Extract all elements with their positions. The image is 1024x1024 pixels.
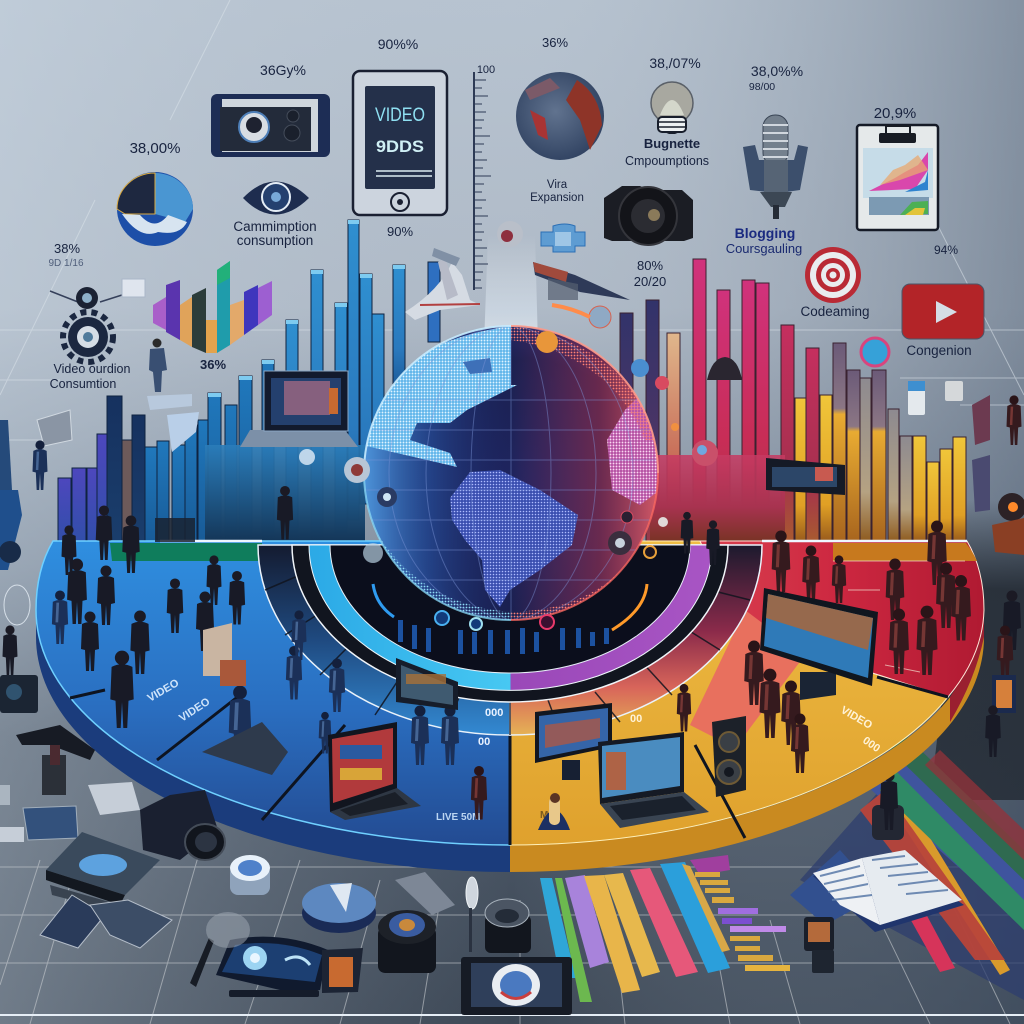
label: codeaming: Codeaming <box>800 304 870 319</box>
small items left of globe <box>147 394 199 542</box>
left side scattered devices <box>0 410 72 713</box>
laptop on blue half <box>328 722 421 820</box>
isometric bar chart <box>153 261 272 353</box>
person statuette base <box>202 722 288 775</box>
back monitor on blue half <box>396 658 458 710</box>
percentage: 20,9%: 20,9% <box>874 105 916 122</box>
percentage: left 38%: 9D 1/16 <box>48 258 84 269</box>
large monitor <box>760 588 878 700</box>
percentage: 38,0%: 98/00 <box>749 81 775 93</box>
icon: gear with lens <box>50 279 145 362</box>
monitor with console, left of globe <box>240 371 358 447</box>
pen <box>190 938 214 987</box>
icon: tablet with video label <box>353 71 447 215</box>
bar top caps, left <box>208 220 405 397</box>
rainbow stripes on floor, right <box>790 735 1024 1000</box>
percentage: 38,00%: 38,00% <box>130 140 180 157</box>
icon: tablet with video label: 9DDS <box>376 137 424 156</box>
figurine on warm half <box>538 793 570 830</box>
spaceship <box>533 262 630 317</box>
inner cell band, left <box>258 545 510 735</box>
colored ring <box>309 545 712 690</box>
label: blogging consuming: Coursgauling <box>726 241 802 256</box>
glow bars at globe base <box>398 620 609 654</box>
dotted hemisphere, upper left <box>362 326 517 467</box>
right bar chart <box>620 259 966 541</box>
label: expansion <box>530 179 584 204</box>
percentage: 80% 20/20: 80% <box>637 258 663 273</box>
monitor on warm half <box>535 703 612 780</box>
dark blot on upper hemisphere <box>463 358 492 374</box>
platform labels: MIX <box>540 810 558 821</box>
papers stack on platform <box>203 623 246 686</box>
small paper pile <box>395 872 455 915</box>
platform top, red half <box>700 541 984 697</box>
wide screen, right of globe <box>766 458 845 495</box>
orange back strip <box>833 543 977 561</box>
stacked mini bars <box>695 872 790 971</box>
dotted land, right rim <box>607 395 660 505</box>
platform labels: LIVE 50M <box>436 812 480 823</box>
label: blogging consuming <box>726 225 802 256</box>
label: bubble consumption: Bugnette <box>644 136 700 151</box>
icon: webcam box <box>211 94 330 157</box>
salmon wedge <box>690 610 805 748</box>
platform labels: VIDEO <box>838 704 875 732</box>
icon: eye <box>243 182 309 214</box>
platform labels <box>146 677 882 823</box>
airplane <box>405 248 480 320</box>
lower rim sparkle, right <box>511 572 620 620</box>
icon: light bulb <box>651 82 693 134</box>
laptop on warm half <box>598 732 709 828</box>
platform top, blue half <box>36 541 510 845</box>
south america landmass <box>450 470 578 607</box>
small containers, right <box>908 381 963 415</box>
percentage: 36% camera: 36Gy% <box>260 62 306 78</box>
ruler scale <box>474 64 495 290</box>
people on blue half <box>52 486 487 820</box>
label: consumption: consumption <box>237 233 313 248</box>
label: bubble consumption: Cmpoumptions <box>625 154 709 168</box>
video camera on tripod <box>16 725 95 795</box>
color strips chart on floor <box>540 855 730 1002</box>
globe left glow <box>364 332 487 616</box>
central black well <box>330 545 690 673</box>
icon: mini globe <box>516 72 604 160</box>
disc stack <box>302 883 376 933</box>
globe <box>359 235 664 628</box>
inner cell band, right <box>510 545 762 735</box>
platform labels: VIDEO <box>177 696 213 725</box>
icon: dslr camera <box>604 186 693 245</box>
percentage: 38,0%: 38,0%% <box>751 63 803 79</box>
platform labels: 000 <box>860 735 882 755</box>
percentage: 90% under tablet: 90% <box>387 224 413 239</box>
photo camera on floor <box>140 790 225 860</box>
photo cards left <box>0 782 140 842</box>
icon: video play button <box>902 284 984 339</box>
photo strip cards left <box>40 895 172 948</box>
ruler scale: 100 <box>477 64 495 76</box>
icon: target <box>805 247 861 303</box>
left bar chart <box>58 220 440 548</box>
white back rim <box>160 540 967 542</box>
blue haze at base of left bars <box>205 445 365 541</box>
red haze at base of right bars <box>650 455 785 541</box>
icon: tablet with video label: VIDEO <box>375 105 425 126</box>
second lens <box>485 899 531 953</box>
icon: clipboard chart <box>857 125 938 230</box>
globe right glow <box>511 326 658 620</box>
percentage: 38,07%: 38,/07% <box>649 55 701 71</box>
orange marker <box>536 331 558 353</box>
platform labels: 00 <box>630 713 642 725</box>
segment dividers <box>70 677 948 845</box>
small device on floor <box>804 917 834 973</box>
label: expansion: Expansion <box>530 192 584 204</box>
video cards <box>216 937 363 997</box>
label: expansion: Vira <box>547 179 568 191</box>
right side scattered devices <box>972 395 1024 757</box>
platform side wall, red end <box>950 610 984 722</box>
platform labels: VIDEO <box>146 677 182 705</box>
figure on tripod, floor right <box>872 770 904 840</box>
magnifier <box>466 877 478 952</box>
open book <box>813 850 964 932</box>
percentage: top 90%: 90%% <box>378 36 418 52</box>
speaker <box>712 716 746 797</box>
people on warm half <box>677 512 971 773</box>
percentage: 80% 20/20: 20/20 <box>634 274 666 289</box>
pink rim, upper right <box>511 326 660 440</box>
light beam <box>484 235 538 345</box>
percentage: 80% 20/20 <box>634 258 666 289</box>
lens <box>378 910 436 973</box>
label: congenion: Congenion <box>906 343 972 358</box>
label: consumption: Cammimption <box>233 219 317 234</box>
green accent strip <box>110 543 262 561</box>
label: consumption <box>233 219 317 248</box>
platform side wall, blue <box>36 610 510 872</box>
platform labels: 00 <box>478 736 490 748</box>
red strip on floor <box>908 912 955 972</box>
stacked reports left <box>46 832 160 912</box>
label: blogging consuming: Blogging <box>735 225 795 241</box>
small blue icon <box>541 224 585 252</box>
label: video consumption: Consumtion <box>50 377 116 391</box>
glass cylinder <box>230 855 270 895</box>
percentage: left 38% <box>48 241 84 269</box>
orange glow accent <box>612 584 647 630</box>
percentage: 38,0% <box>749 63 803 93</box>
small glass bag <box>206 912 250 948</box>
lower rim sparkle, left <box>379 538 511 620</box>
label: video consumption <box>50 362 131 391</box>
floating orbit icons <box>299 221 889 630</box>
segmented circular platform <box>36 541 984 872</box>
icon: eye gauge label: 36% <box>200 357 226 372</box>
platform labels: 000 <box>485 707 503 719</box>
percentage: 36% globe: 36% <box>542 35 568 50</box>
blue glow accent <box>373 584 394 617</box>
label: bubble consumption <box>625 136 709 168</box>
dark ring <box>292 545 728 702</box>
platform top, yellow half <box>510 541 948 845</box>
platform side wall, warm <box>510 610 984 872</box>
icon: pie chart <box>117 172 193 246</box>
percentage: left 38%: 38% <box>54 241 80 256</box>
tablet on floor <box>461 957 572 1015</box>
label: video consumption: Video ourdion <box>54 362 131 376</box>
percentage: 94%: 94% <box>934 243 958 257</box>
standing person on platform side <box>149 338 167 392</box>
icon: microphone <box>743 115 808 219</box>
